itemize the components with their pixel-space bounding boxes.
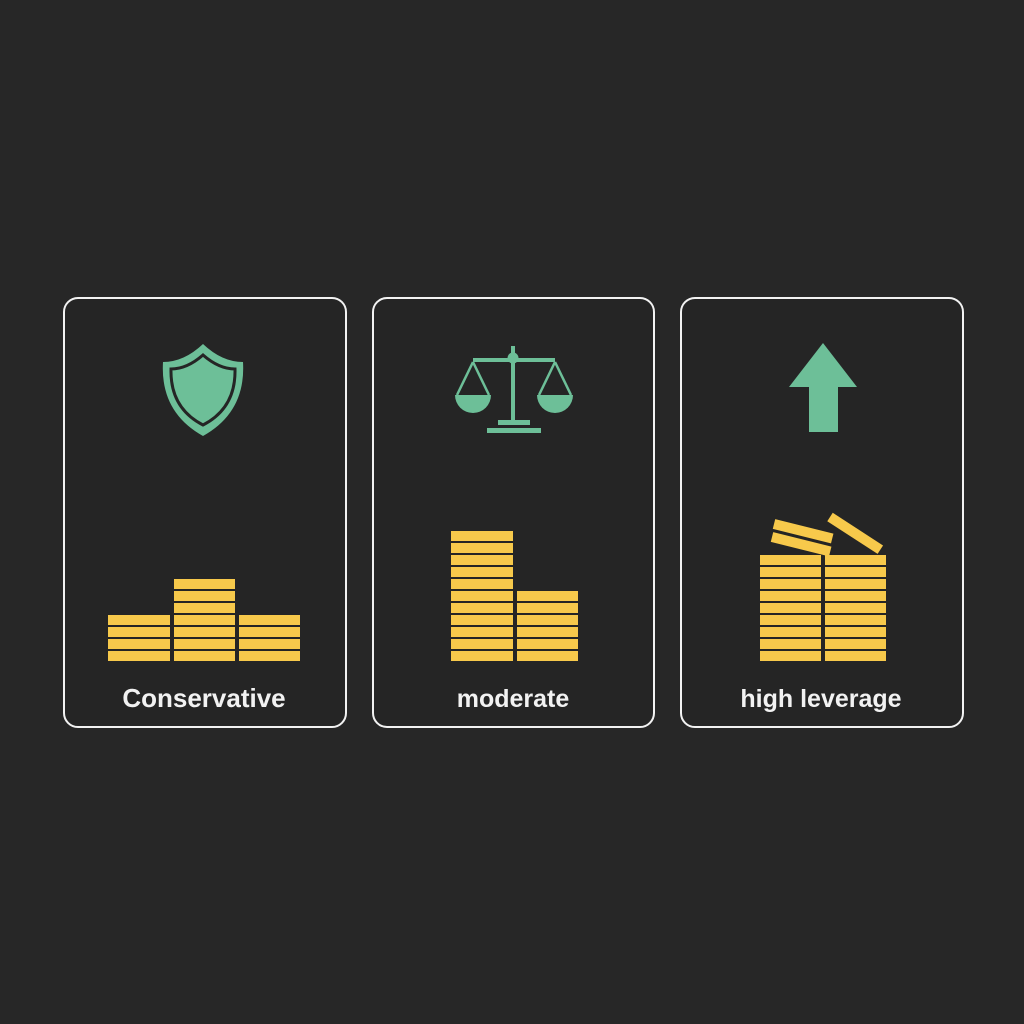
chart: coin stacks conservative <box>108 579 300 661</box>
panel: conservative <box>64 298 346 727</box>
chart: coin stacks moderate <box>451 531 578 661</box>
icon: up arrow <box>789 343 857 432</box>
label: Conservative: Conservative <box>122 683 286 713</box>
icon: shield <box>163 344 243 436</box>
chart: coin stacks high leverage <box>760 513 886 661</box>
icon: scale <box>455 346 573 433</box>
panel: moderate <box>373 298 654 727</box>
label: high leverage: high leverage <box>740 685 902 713</box>
label: moderate: moderate <box>457 685 569 713</box>
panel: high leverage <box>681 298 963 727</box>
